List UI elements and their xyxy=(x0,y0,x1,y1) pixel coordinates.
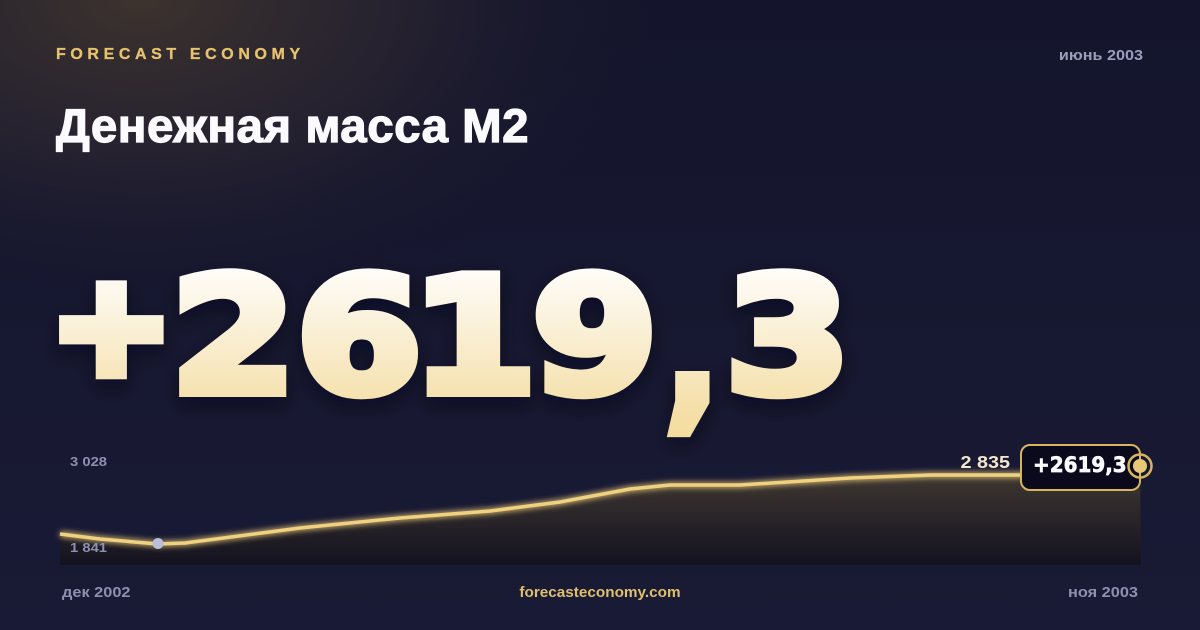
end point marker xyxy=(1128,454,1152,478)
date label: июнь 2003 xyxy=(1059,48,1143,64)
big value: + xyxy=(51,247,172,405)
brand label: FORECAST ECONOMY xyxy=(56,46,305,63)
low point marker xyxy=(152,538,164,549)
big value: 2619 xyxy=(170,245,658,430)
value callout: +2619,3 xyxy=(1033,453,1127,477)
line chart xyxy=(60,466,1141,565)
big value: , xyxy=(665,252,720,448)
end date: ноя 2003 xyxy=(1068,585,1138,601)
line xyxy=(60,466,1140,544)
title: Денежная масса М2 xyxy=(56,100,529,153)
line glow xyxy=(60,466,1140,544)
last value label: 2 835 xyxy=(960,453,1010,473)
source url: forecasteconomy.com xyxy=(519,584,681,601)
big value xyxy=(51,245,851,448)
value callout xyxy=(1021,445,1152,490)
axis max: 3 028 xyxy=(70,454,107,469)
area under line xyxy=(60,466,1141,565)
start date: дек 2002 xyxy=(62,585,131,601)
big value: 3 xyxy=(725,245,851,430)
axis min: 1 841 xyxy=(70,540,107,555)
